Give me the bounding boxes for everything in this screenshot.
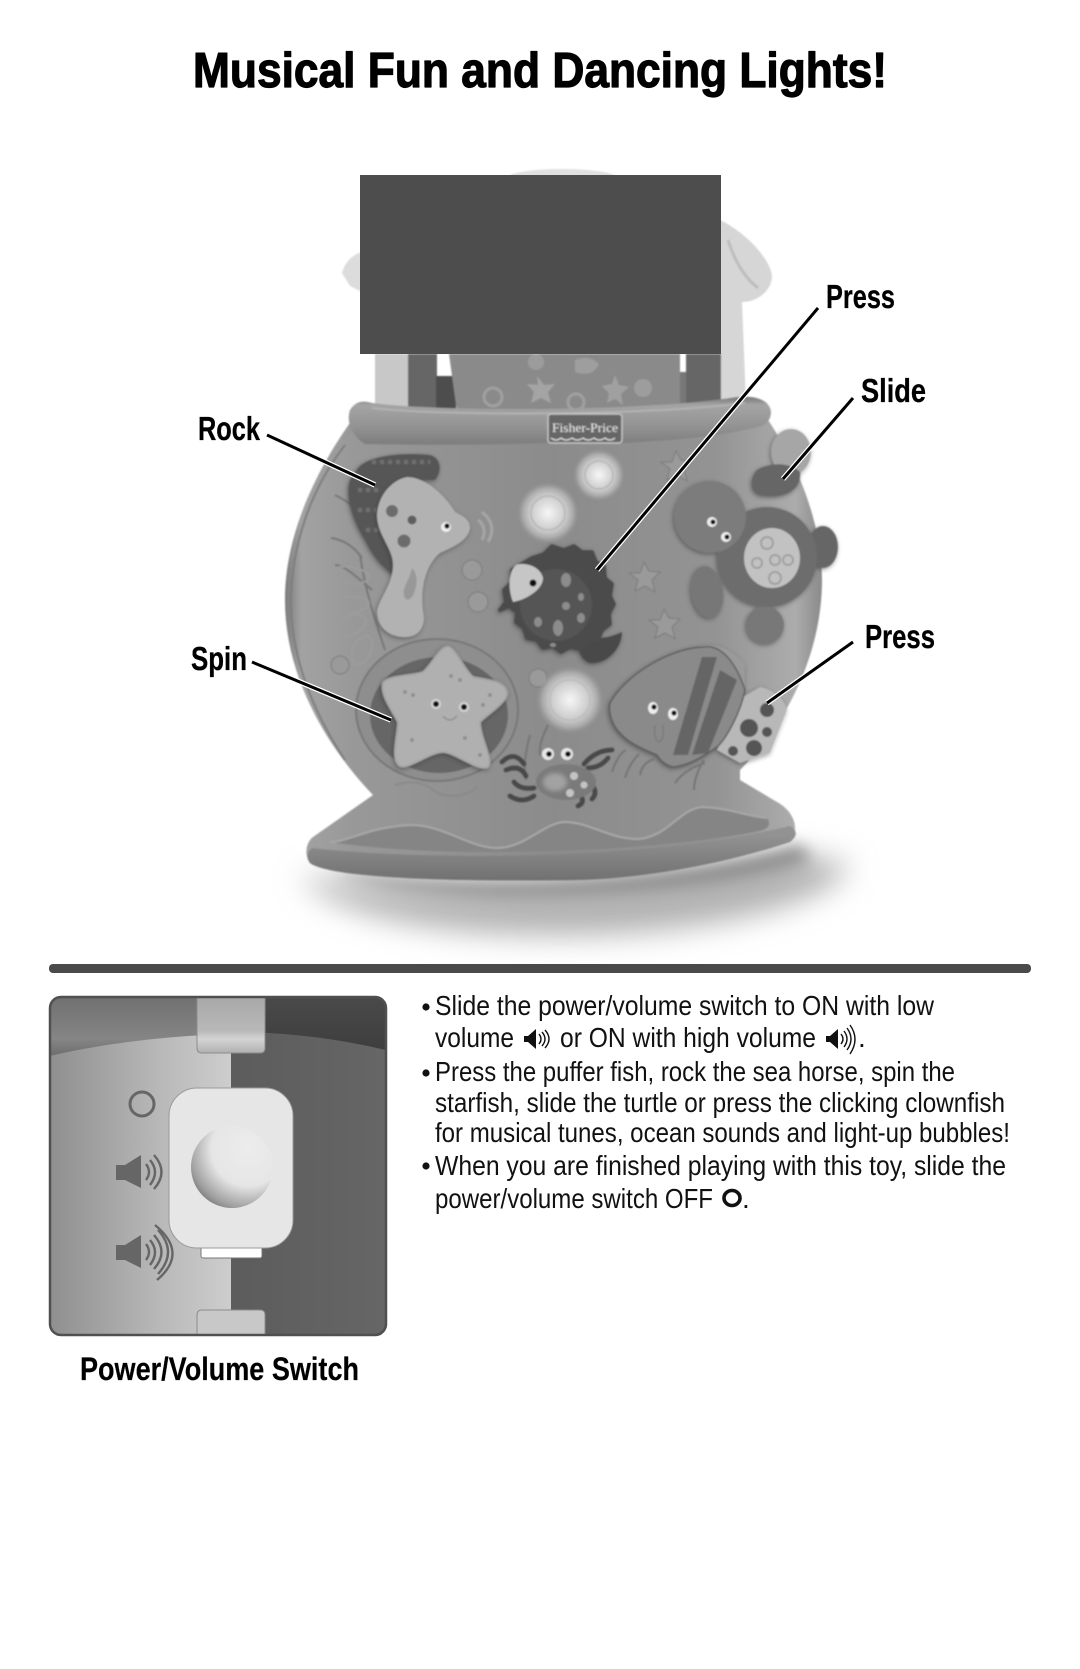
bullet 2 xyxy=(422,1056,1010,1148)
callout: Press puffer fish: Press xyxy=(826,278,895,315)
redaction block xyxy=(360,175,721,354)
callout: Slide: Slide xyxy=(861,372,926,409)
title: Musical Fun and Dancing Lights! xyxy=(193,44,887,98)
fern decoration xyxy=(330,495,385,667)
slider knob xyxy=(169,1088,293,1258)
callout: Rock xyxy=(198,410,375,485)
bowl rim xyxy=(349,397,771,445)
bullet 1: . xyxy=(858,1022,866,1053)
fisher-price logo: Fisher-Price xyxy=(552,420,618,435)
caption: power/volume switch: Power/Volume Switch xyxy=(80,1351,359,1387)
callout: Spin xyxy=(191,640,391,720)
bullet 2: starfish, slide the turtle or press the clicking clownfish xyxy=(435,1087,1005,1118)
puffer fish xyxy=(500,546,622,663)
off symbol xyxy=(130,1092,154,1116)
toy photo: ocean fishbowl xyxy=(285,169,850,935)
starfish spinner xyxy=(356,639,518,781)
fisher-price logo xyxy=(548,414,622,443)
bullet 2: Press the puffer fish, rock the sea horse, spin the xyxy=(435,1056,955,1087)
bowl body xyxy=(285,420,822,880)
instructions text xyxy=(422,990,1010,1214)
callout: Spin: Spin xyxy=(191,640,247,677)
bullet 1: or ON with high volume xyxy=(560,1022,816,1053)
bullet 3: power/volume switch OFF xyxy=(435,1183,713,1214)
bullet 3 xyxy=(422,1150,1006,1214)
low volume symbol xyxy=(116,1155,162,1189)
sea grass xyxy=(395,725,705,796)
ground shadow xyxy=(300,845,850,935)
base wave and band xyxy=(308,807,796,880)
crab xyxy=(502,748,612,806)
panel: power/volume switch illustration xyxy=(50,996,386,1336)
bullet 1 xyxy=(422,990,935,1054)
upper handle silhouette xyxy=(342,169,772,410)
callout: Slide xyxy=(783,372,926,479)
callout: Press clownfish: Press xyxy=(865,618,935,655)
bullet 1: Slide the power/volume switch to ON with low xyxy=(435,990,935,1021)
callout: Rock: Rock xyxy=(198,410,260,447)
icon: off symbol xyxy=(724,1190,740,1206)
bullet 1: volume xyxy=(435,1022,514,1053)
light-up bubbles xyxy=(517,449,625,734)
bullet 3: . xyxy=(742,1183,750,1214)
icon: low volume xyxy=(524,1029,549,1049)
relief stars xyxy=(331,451,692,687)
bullet 3: When you are finished playing with this toy, slide the xyxy=(435,1150,1006,1181)
roller with shapes xyxy=(449,354,680,412)
clownfish xyxy=(609,645,787,767)
sea horse xyxy=(348,454,492,637)
turtle xyxy=(674,429,838,644)
callout: Press puffer fish xyxy=(597,278,895,570)
callout: Press clownfish xyxy=(767,618,935,703)
icon: high volume xyxy=(826,1025,855,1054)
high volume symbol xyxy=(116,1225,173,1280)
slider track tabs xyxy=(197,996,265,1336)
